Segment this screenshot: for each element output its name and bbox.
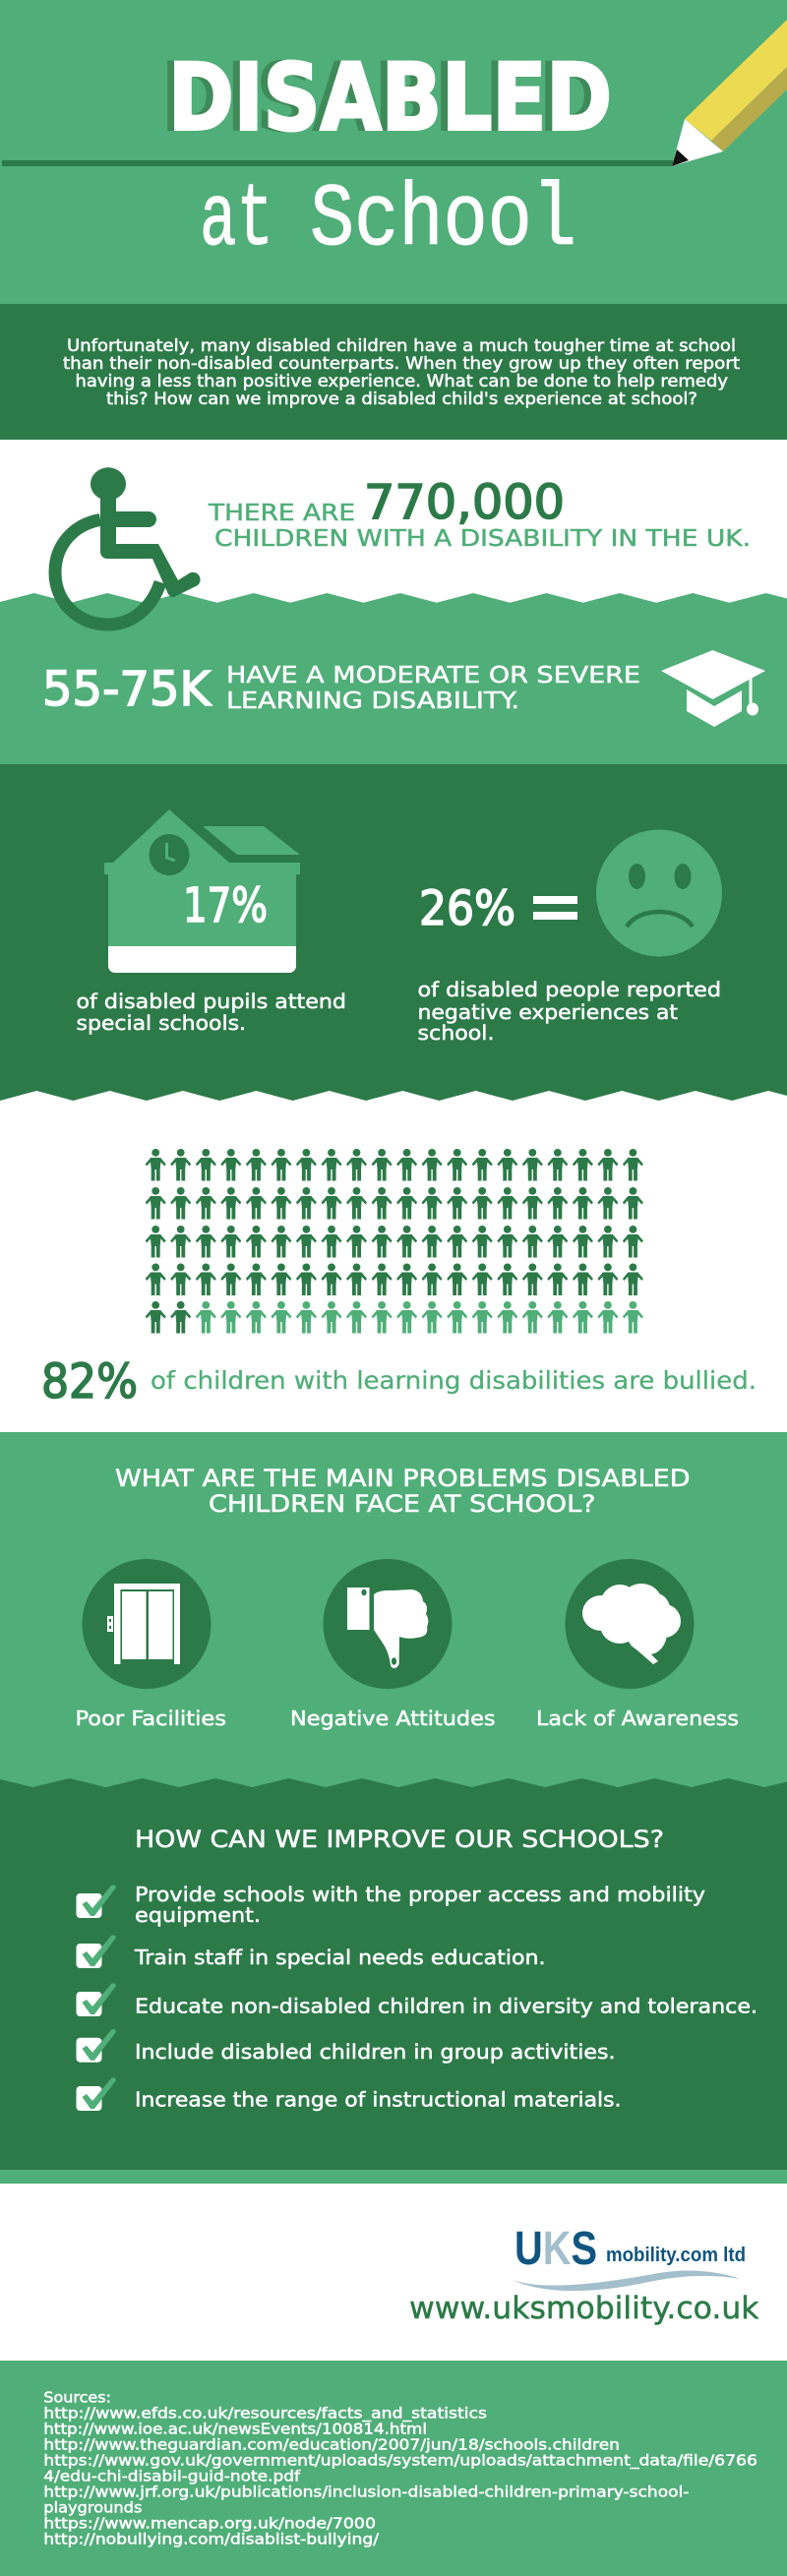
heading: main problems: CHILDREN FACE AT SCHOOL? bbox=[209, 1490, 596, 1518]
subtitle: at School bbox=[200, 171, 576, 271]
item: instructional materials: Increase the range of instructional materials. bbox=[135, 2088, 622, 2112]
sources list bbox=[43, 2389, 757, 2548]
label: moderate or severe learning disability bbox=[226, 661, 640, 714]
heading: how can we improve: HOW CAN WE IMPROVE OUR SCHOOLS? bbox=[135, 1826, 664, 1853]
subtitle: at School: School bbox=[310, 171, 576, 271]
text: special schools bbox=[77, 989, 346, 1035]
sources list: 4/edu-chi-disabil-guid-note.pdf bbox=[43, 2468, 301, 2486]
item: train staff: Train staff in special needs education. bbox=[134, 1946, 545, 1969]
item: group activities: Include disabled children in group activities. bbox=[135, 2040, 616, 2064]
panel: introduction bbox=[0, 304, 787, 440]
subtitle: at School: at bbox=[200, 171, 273, 271]
panel: 55-75K learning disability bbox=[0, 593, 787, 764]
label: moderate or severe learning disability: LEARNING DISABILITY. bbox=[226, 687, 519, 714]
item: access and mobility: Provide schools with the proper access and mobility bbox=[135, 1883, 705, 1906]
text: special schools: special schools. bbox=[77, 1011, 246, 1035]
sources list: http://www.theguardian.com/education/2007/jun/18/schools.children bbox=[43, 2436, 620, 2454]
icon: graduation cap bbox=[661, 650, 765, 727]
panel: main problems bbox=[0, 1432, 787, 1788]
text: special schools: of disabled pupils attend bbox=[77, 989, 346, 1013]
text: negative experiences bbox=[417, 978, 721, 1045]
icon: pencil bbox=[672, 20, 787, 166]
stat: 26%: 26% bbox=[419, 881, 515, 936]
underline stroke bbox=[2, 160, 673, 166]
title: DISABLED: DISABLED bbox=[168, 45, 612, 151]
stat: 55-75K: 55-75K bbox=[42, 662, 212, 717]
panel: statistics on dark band bbox=[0, 764, 787, 1103]
sources list: Sources: bbox=[43, 2389, 111, 2407]
text: negative experiences: negative experiences at bbox=[417, 1000, 678, 1024]
text: negative experiences: of disabled people reported bbox=[417, 978, 721, 1001]
item: diversity and tolerance bbox=[77, 1983, 757, 2018]
icon: elevator bbox=[107, 1584, 180, 1664]
sources list: http://www.jrf.org.uk/publications/inclusion-disabled-children-primary-school- bbox=[43, 2484, 690, 2501]
logo: UKS mobility.com ltd bbox=[513, 2223, 746, 2291]
panel: 770,000 children bbox=[55, 467, 751, 625]
heading: main problems: WHAT ARE THE MAIN PROBLEMS DISABLED bbox=[115, 1465, 691, 1492]
heading: main problems bbox=[115, 1465, 691, 1518]
label: Negative Attitudes bbox=[290, 1707, 496, 1730]
panel: improve our schools bbox=[0, 1778, 787, 2170]
text: children with a disability: CHILDREN WITH A DISABILITY IN THE UK. bbox=[214, 524, 751, 552]
logo: UKS mobility.com ltd: UKS bbox=[515, 2223, 597, 2275]
website url: www.uksmobility.co.uk bbox=[409, 2291, 759, 2326]
panel: sources bbox=[0, 2361, 787, 2576]
sources list: https://www.gov.uk/government/uploads/system/uploads/attachment_data/file/6766 bbox=[43, 2452, 757, 2471]
panel: bullying bbox=[41, 1149, 757, 1409]
item: access and mobility bbox=[77, 1883, 705, 1927]
chart: 100 person pictogram, 82 dark bbox=[146, 1149, 643, 1334]
intro text: having a less than positive experience. What can be done to help remedy bbox=[75, 372, 728, 390]
item: access and mobility: equipment. bbox=[135, 1903, 261, 1927]
item: group activities bbox=[77, 2029, 616, 2064]
item: instructional materials bbox=[77, 2077, 622, 2112]
icon: thumbs down bbox=[347, 1588, 428, 1668]
icon: wheelchair user bbox=[55, 467, 201, 625]
label: Lack of Awareness bbox=[536, 1707, 739, 1730]
icon: sad face bbox=[596, 830, 722, 956]
sources list: playgrounds bbox=[43, 2499, 143, 2517]
sources list: https://www.mencap.org.uk/node/7000 bbox=[43, 2515, 376, 2533]
text: there are: THERE ARE bbox=[208, 499, 355, 526]
intro text bbox=[63, 336, 741, 408]
stat: 17%: 17% bbox=[183, 878, 268, 933]
label: moderate or severe learning disability: HAVE A MODERATE OR SEVERE bbox=[226, 661, 640, 689]
problem: poor facilities bbox=[75, 1559, 226, 1730]
text: children bullied: of children with learning disabilities are bullied. bbox=[151, 1366, 757, 1395]
sources list: http://www.ioe.ac.uk/newsEvents/100814.html bbox=[43, 2421, 427, 2438]
panel: logo and website bbox=[409, 2223, 759, 2326]
item: diversity and tolerance: Educate non-disabled children in diversity and tolerance. bbox=[135, 1995, 757, 2018]
label: Poor Facilities bbox=[75, 1707, 226, 1730]
logo: UKS mobility.com ltd: mobility.com ltd bbox=[606, 2245, 746, 2266]
icon: school building bbox=[104, 809, 300, 973]
title: DISABLED: DISABLED bbox=[161, 45, 605, 151]
stat: 82%: 82% bbox=[41, 1354, 138, 1409]
text: negative experiences: school. bbox=[417, 1021, 494, 1045]
sources list: http://nobullying.com/disablist-bullying/ bbox=[43, 2531, 380, 2548]
problem: lack of awareness bbox=[536, 1559, 739, 1730]
item: train staff bbox=[77, 1935, 545, 1969]
intro text: than their non-disabled counterparts. When they grow up they often report bbox=[63, 354, 741, 373]
icon: equals sign bbox=[533, 896, 577, 920]
panel: header bbox=[0, 0, 787, 304]
sources list: http://www.efds.co.uk/resources/facts_and_statistics bbox=[43, 2405, 487, 2424]
problem: negative attitudes bbox=[290, 1559, 496, 1730]
intro text: Unfortunately, many disabled children have a much tougher time at school bbox=[67, 336, 736, 355]
intro text: this? How can we improve a disabled child's experience at school? bbox=[106, 389, 697, 408]
icon: brain bbox=[582, 1584, 681, 1664]
stat: 770,000: 770,000 bbox=[364, 475, 565, 530]
